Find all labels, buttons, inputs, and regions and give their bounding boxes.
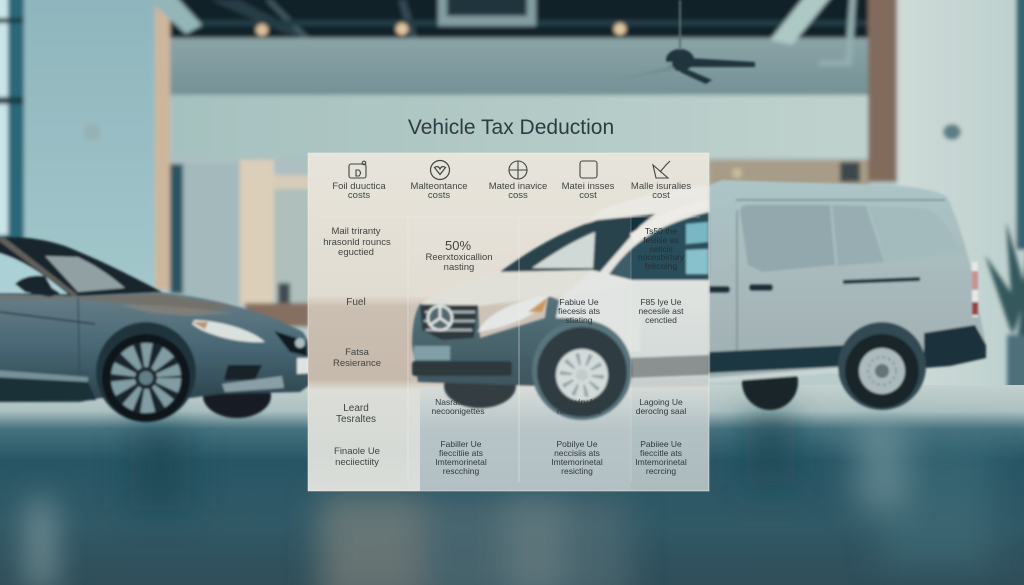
column headers: Mated inavice xyxy=(489,181,547,192)
row: main warranty: Mail triranty xyxy=(331,226,381,237)
cell: bottom column 2: Imtemorinetal xyxy=(435,457,487,467)
title: Vehicle Tax Deduction xyxy=(408,116,614,139)
cell: leard column 4: deroclng saal xyxy=(636,406,686,416)
column headers: costs xyxy=(348,190,370,201)
cell: bottom column 4: Pabiiee Ue xyxy=(640,439,682,449)
table text and icons xyxy=(323,160,691,476)
stat: 50%: 50% xyxy=(445,238,471,253)
row: leard tesraltes xyxy=(336,403,376,425)
van xyxy=(412,180,986,420)
cell: bottom column 2: fieccitiie ats xyxy=(439,448,483,458)
icon: fuel receipt xyxy=(349,161,366,178)
cell: bottom column 2: Fabiller Ue xyxy=(440,439,482,449)
column headers: costs xyxy=(428,190,450,201)
row: main warranty: eguctied xyxy=(338,247,374,258)
row: main warranty xyxy=(323,226,391,258)
row: fatsa resierance xyxy=(333,347,381,369)
cell: fuel column 4 xyxy=(639,297,684,325)
stat: 50% xyxy=(425,238,493,273)
cell: fuel column 4: F85 lye Ue xyxy=(640,297,682,307)
cell: bottom column 3: resicting xyxy=(561,466,593,476)
icon: square xyxy=(580,161,597,178)
showroom background xyxy=(0,0,1024,410)
cell: top right: seticis xyxy=(649,244,673,254)
stat: 50%: Reerxtoxicallion xyxy=(425,252,493,263)
cell: leard column 4 xyxy=(636,397,686,416)
panel glass overlay xyxy=(308,153,709,491)
stat: 50%: nasting xyxy=(444,262,474,273)
cell: bottom column 3: Imtemorinetal xyxy=(551,457,603,467)
column headers: Malle isuralies xyxy=(631,181,691,192)
column headers: cost xyxy=(652,190,670,201)
row: leard tesraltes: Tesraltes xyxy=(336,414,376,425)
cell: bottom column 4: fieccitle ats xyxy=(640,448,682,458)
icon: globe xyxy=(509,161,527,179)
cell: top right: felrcoing xyxy=(645,261,677,271)
row: leard tesraltes: Leard xyxy=(343,403,369,414)
cell: top right xyxy=(638,226,685,271)
cell: bottom column 3: Pobilye Ue xyxy=(556,439,598,449)
cell: fuel column 3: fiecesis ats xyxy=(558,306,600,316)
potted plant xyxy=(985,222,1024,390)
cell: leard column 3: recsoragles xyxy=(557,406,601,416)
cell: top right: nocesbirtury xyxy=(638,252,685,262)
cell: top right: fesiise as xyxy=(643,235,679,245)
cell: leard column 3: Lleswiry Ue xyxy=(557,397,601,407)
cell: leard column 2: necoonigettes xyxy=(432,406,484,416)
row: main warranty: hrasonld rouncs xyxy=(323,237,391,248)
ceiling fan xyxy=(610,0,755,84)
icon: satellite dish xyxy=(653,161,670,178)
cell: fuel column 3 xyxy=(558,297,600,325)
column headers xyxy=(332,181,691,201)
row: fuel: Fuel xyxy=(346,297,366,308)
row: finaole xyxy=(334,446,380,468)
cell: bottom column 2: rescching xyxy=(443,466,479,476)
cell: fuel column 3: stiating xyxy=(566,315,593,325)
cell: leard column 2 xyxy=(432,397,484,416)
floor xyxy=(0,385,1024,585)
cell: bottom column 4: recrcing xyxy=(646,466,676,476)
row: fatsa resierance: Resierance xyxy=(333,358,381,369)
column headers: cost xyxy=(579,190,597,201)
cell: fuel column 4: necesile ast xyxy=(639,306,684,316)
cell: leard column 4: Lagoing Ue xyxy=(639,397,683,407)
column headers: Foil duuctica xyxy=(332,181,386,192)
column headers: coss xyxy=(508,190,528,201)
cell: bottom column 4 xyxy=(635,439,687,476)
column headers: Malteontance xyxy=(410,181,468,192)
cell: fuel column 4: cenctied xyxy=(645,315,677,325)
sedan car xyxy=(0,237,315,422)
semi-transparent table panel xyxy=(308,153,709,491)
cell: bottom column 4: Imtemorinetal xyxy=(635,457,687,467)
cell: fuel column 3: Fabiue Ue xyxy=(559,297,599,307)
cell: top right: Ts50 the xyxy=(645,226,677,236)
cell: bottom column 2 xyxy=(435,439,487,476)
column headers: Matei insses xyxy=(562,181,615,192)
cell: bottom column 3 xyxy=(551,439,603,476)
icon: maintenance heart xyxy=(430,160,450,180)
row: finaole: neciiectiity xyxy=(335,457,379,468)
cell: leard column 2: Nasrater Ue xyxy=(435,397,481,407)
cell: bottom column 3: neccisiis ats xyxy=(554,448,600,458)
row: fatsa resierance: Fatsa xyxy=(345,347,370,358)
row: finaole: Finaole Ue xyxy=(334,446,380,457)
cell: leard column 3 xyxy=(557,397,601,416)
